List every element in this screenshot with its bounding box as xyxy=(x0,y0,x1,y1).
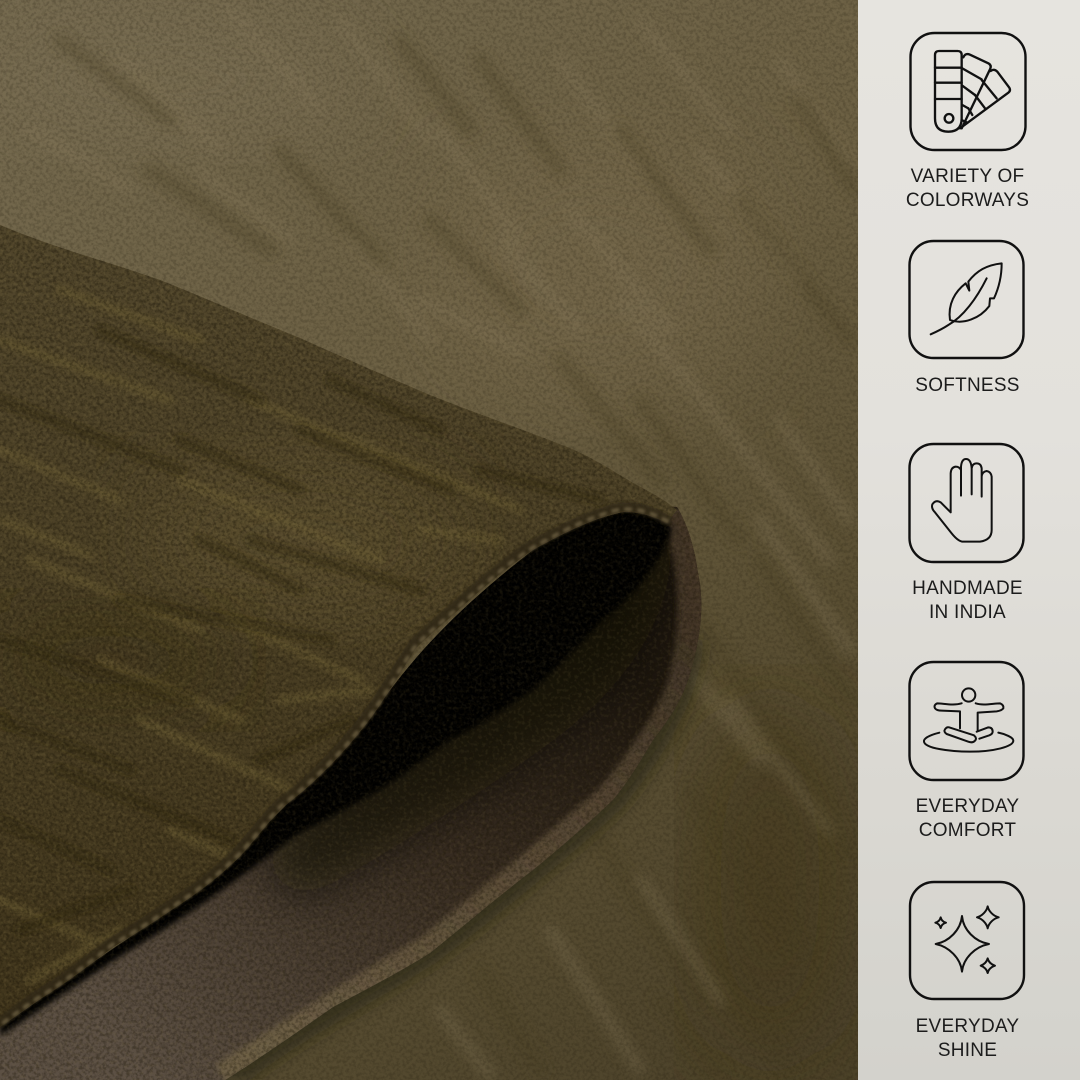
soft darkness around hollow xyxy=(260,520,671,900)
label: variety of colorways xyxy=(906,166,1029,211)
icon: colour swatch fan xyxy=(910,33,1026,150)
label: everyday comfort: COMFORT xyxy=(919,820,1016,841)
photo: folded olive rug xyxy=(0,0,858,1080)
icon: sparkles xyxy=(910,882,1024,999)
label: variety of colorways: COLORWAYS xyxy=(906,190,1029,211)
stitched edge of fold xyxy=(0,507,667,1025)
label: handmade in india xyxy=(912,578,1023,623)
rug top face xyxy=(0,225,677,1018)
label: handmade in india: IN INDIA xyxy=(929,602,1006,623)
label: everyday comfort xyxy=(916,796,1019,841)
icon: meditating person xyxy=(910,662,1024,780)
label: variety of colorways: VARIETY OF xyxy=(911,166,1024,187)
label: everyday shine xyxy=(916,1016,1019,1061)
icons sidebar xyxy=(908,32,1027,1000)
floor rug surface xyxy=(0,0,858,1080)
underside rim xyxy=(225,507,696,1080)
label: everyday shine: SHINE xyxy=(938,1040,997,1061)
label: handmade in india: HANDMADE xyxy=(912,578,1023,599)
label: everyday shine: EVERYDAY xyxy=(916,1016,1019,1037)
rug underside xyxy=(0,506,702,1080)
panel: sidebar background xyxy=(858,0,1080,1080)
dark inner hollow xyxy=(0,505,672,1036)
icon: hand xyxy=(910,444,1024,562)
label: everyday comfort: EVERYDAY xyxy=(916,796,1019,817)
shadow under fold xyxy=(180,640,704,1080)
icon: feather xyxy=(910,241,1024,358)
label: softness: SOFTNESS xyxy=(915,375,1020,396)
